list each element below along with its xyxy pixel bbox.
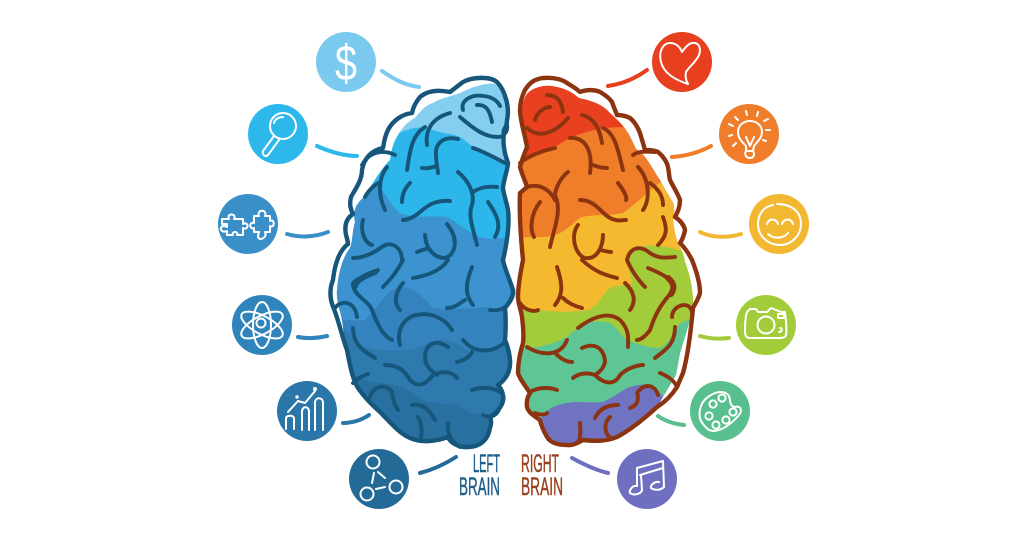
label: right brain (521, 450, 563, 501)
icon: music notes (617, 449, 677, 509)
label: left brain: BRAIN (459, 473, 500, 501)
icon: paint palette (690, 381, 750, 441)
left brain outline (330, 78, 513, 447)
right brain outline (518, 78, 700, 445)
left brain colour bands (336, 84, 511, 445)
icon: puzzle pieces (218, 194, 278, 254)
icon: atom (232, 295, 292, 355)
icon: light bulb (719, 104, 779, 164)
icon: bar chart (277, 381, 337, 441)
left brain folds (335, 96, 507, 447)
icon: heart (652, 32, 712, 92)
label: right brain: RIGHT (521, 450, 559, 478)
label: right brain: BRAIN (521, 473, 563, 501)
text: LEFT (473, 450, 500, 478)
icon: dollar: $ (335, 35, 357, 91)
icon: camera (736, 295, 796, 355)
right brain colour bands (520, 86, 693, 443)
right brain (516, 76, 702, 448)
icon: dollar (316, 32, 376, 92)
icon: magnifying glass (248, 104, 308, 164)
label: left brain (459, 450, 500, 501)
connector lines (287, 70, 741, 473)
icon: smiley (749, 194, 809, 254)
right brain folds (520, 95, 692, 442)
icon: network nodes (349, 449, 409, 509)
left brain (328, 76, 516, 450)
